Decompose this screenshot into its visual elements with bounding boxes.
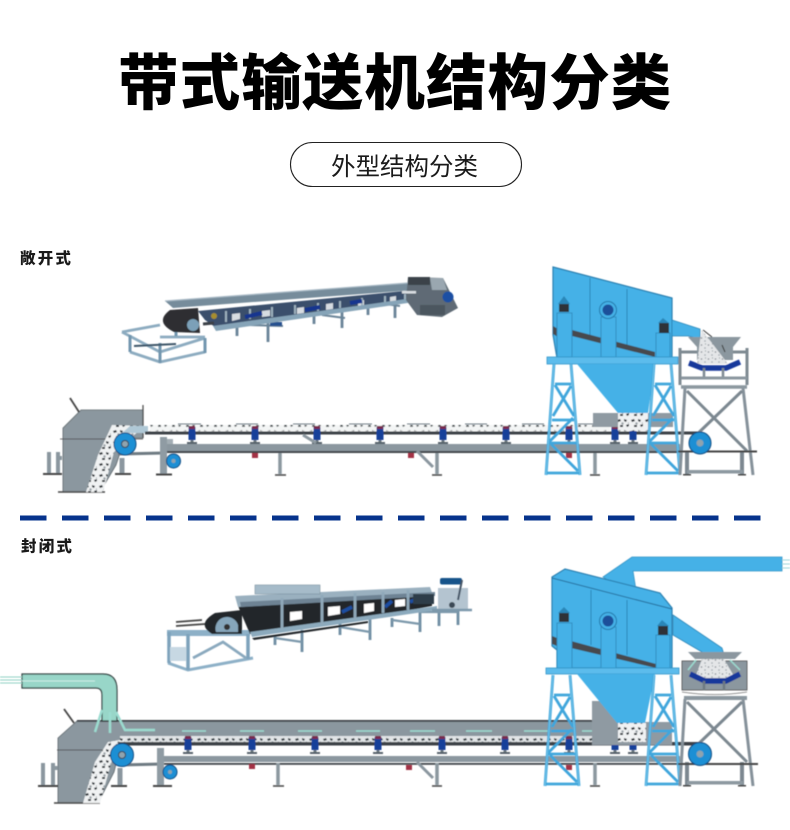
tail pulley bbox=[163, 308, 200, 333]
falling material bbox=[86, 425, 145, 492]
spring posts bbox=[557, 623, 670, 668]
return rollers bbox=[252, 453, 572, 458]
belt bbox=[238, 594, 432, 634]
base frame bbox=[122, 325, 205, 362]
panel: open type conveyor bbox=[43, 267, 757, 492]
pulleys bbox=[114, 433, 136, 455]
pulleys bbox=[110, 744, 134, 766]
head bbox=[406, 277, 458, 317]
screen deck bbox=[553, 326, 655, 357]
beam legs bbox=[278, 763, 595, 785]
truss interior bbox=[198, 289, 424, 327]
material block bbox=[618, 413, 648, 431]
supports bbox=[43, 763, 58, 785]
label: open type: 敞开式 bbox=[20, 248, 73, 268]
material block bbox=[618, 723, 646, 742]
screen deck bbox=[552, 636, 656, 668]
lower beam bbox=[250, 606, 437, 637]
vibrating screen: open type bbox=[547, 267, 700, 431]
idlers bbox=[187, 426, 197, 444]
gray receiving box bbox=[592, 701, 672, 745]
platform bbox=[547, 357, 678, 364]
beam bbox=[167, 444, 680, 451]
title: 带式输送机结构分类 bbox=[118, 49, 672, 117]
3D conveyor photo: open type bbox=[122, 277, 458, 363]
3D conveyor photo: closed type bbox=[167, 578, 472, 670]
divider: dashed line bbox=[20, 516, 762, 520]
discharge chute bbox=[673, 615, 725, 658]
support towers bbox=[545, 675, 680, 786]
vibrating screen: closed type bbox=[546, 557, 790, 742]
lower conveyor: closed type bbox=[0, 674, 700, 803]
material on belt bbox=[120, 736, 618, 742]
legs bbox=[275, 610, 458, 652]
hopper bbox=[577, 674, 655, 723]
idlers bbox=[183, 736, 193, 754]
base frame bbox=[167, 630, 250, 636]
belt bbox=[145, 432, 700, 434]
subtitle pill: 外型结构分类 bbox=[331, 153, 478, 181]
spring posts bbox=[557, 313, 670, 357]
head bbox=[438, 588, 468, 610]
label: closed type: 封闭式 bbox=[21, 536, 74, 556]
beam legs bbox=[280, 453, 595, 474]
feeder enclosure and stand bbox=[678, 652, 758, 786]
tail pulley bbox=[205, 610, 242, 634]
subtitle pill bbox=[290, 142, 522, 186]
supports bbox=[49, 452, 62, 473]
beam bbox=[164, 756, 680, 762]
drive pulley bbox=[688, 742, 712, 766]
dust pipe bbox=[603, 557, 782, 590]
return line bbox=[678, 450, 757, 452]
material on belt bbox=[150, 425, 610, 431]
deck and cover bbox=[235, 587, 433, 607]
cover bbox=[118, 721, 618, 745]
lower beam bbox=[213, 296, 428, 331]
direction arrows bbox=[178, 423, 600, 425]
support towers bbox=[546, 364, 680, 475]
legs bbox=[237, 305, 395, 342]
air arrows bbox=[182, 730, 606, 732]
drive pulley bbox=[689, 432, 711, 454]
belt bbox=[118, 742, 700, 746]
dust flare bbox=[95, 710, 155, 733]
lower conveyor: open type bbox=[43, 398, 700, 492]
return rollers bbox=[249, 764, 572, 770]
falling material bbox=[83, 739, 125, 803]
chute bbox=[58, 721, 120, 803]
hopper bbox=[577, 364, 655, 413]
panel: closed type conveyor bbox=[0, 557, 790, 803]
platform bbox=[546, 668, 679, 674]
dust pipe bbox=[22, 674, 117, 721]
chute bbox=[63, 410, 143, 492]
gray receiving box bbox=[593, 413, 673, 427]
tail rod bbox=[176, 620, 205, 626]
return line bbox=[678, 763, 758, 765]
discharge chute bbox=[672, 320, 700, 339]
deck bbox=[165, 283, 430, 308]
feeder with hopper and stand bbox=[678, 330, 757, 476]
posts bbox=[282, 590, 408, 630]
